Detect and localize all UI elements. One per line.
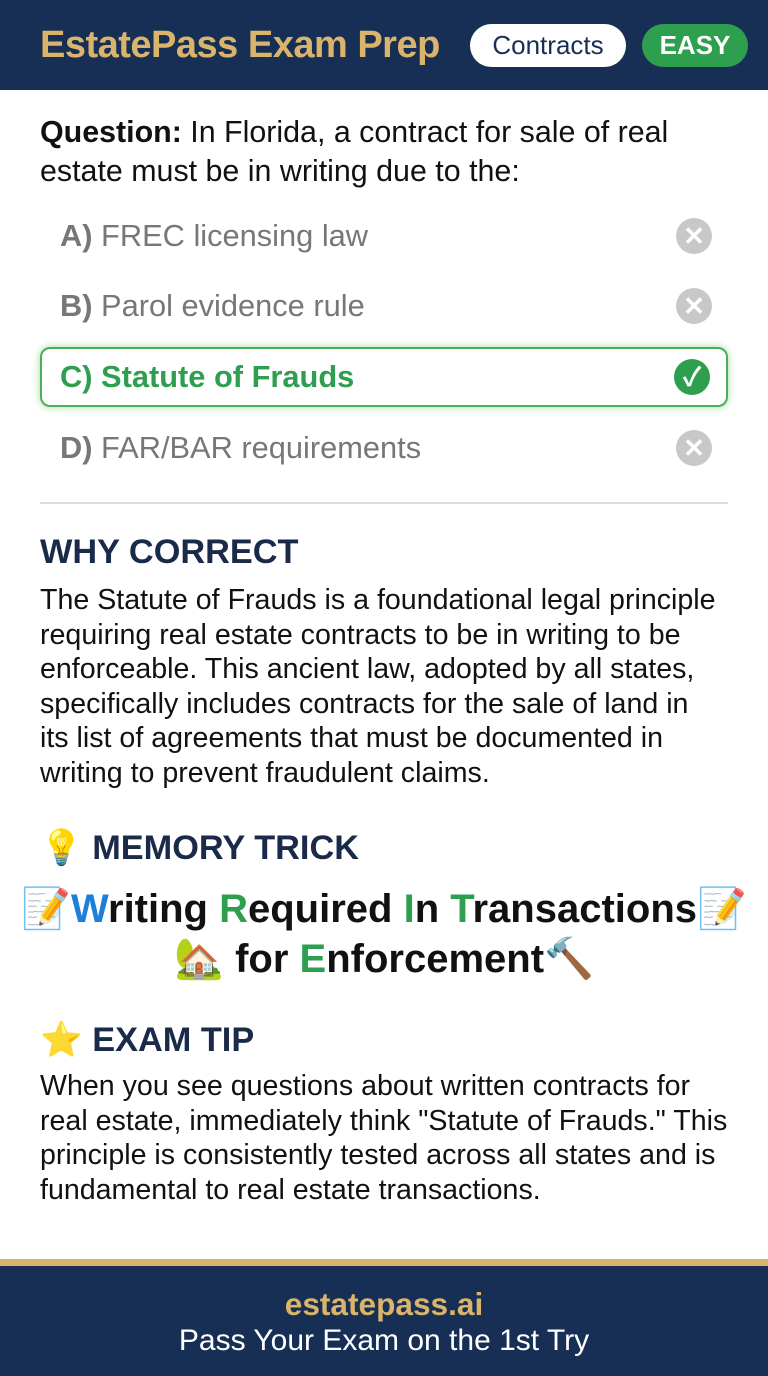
- option B: ✕: [683, 291, 705, 321]
- footer tagline: Pass Your Exam on the 1st Try: [179, 1324, 589, 1357]
- pill: EASY: [642, 24, 748, 67]
- why correct text: requiring real estate contracts to be in writing to be: [40, 619, 681, 651]
- why correct text: [40, 584, 716, 789]
- why correct text: specifically includes contracts for the sale of land in: [40, 688, 688, 720]
- option C correct: [40, 347, 728, 407]
- why correct text: its list of agreements that must be documented in: [40, 722, 663, 754]
- title: EstatePass Exam Prep: [40, 24, 440, 66]
- question: [40, 115, 668, 188]
- footer brand: estatepass.ai: [285, 1286, 483, 1322]
- mnemonic: [21, 886, 747, 981]
- pill: Contracts: Contracts: [492, 30, 604, 60]
- mnemonic: 📝Writing Required In Transactions📝: [21, 887, 747, 931]
- option B: B) Parol evidence rule: [60, 288, 365, 323]
- pill: EASY: EASY: [660, 30, 730, 60]
- why correct text: enforceable. This ancient law, adopted by all states,: [40, 653, 694, 685]
- option A: A) FREC licensing law: [60, 218, 368, 253]
- mnemonic: 🏡 for Enforcement🔨: [174, 937, 594, 981]
- option C correct: ✓: [683, 362, 701, 392]
- header: [0, 0, 768, 90]
- heading: exam tip: ⭐ EXAM TIP: [40, 1021, 254, 1059]
- option A: [60, 218, 712, 254]
- option D: [60, 430, 712, 466]
- option C correct: C) Statute of Frauds: [60, 359, 354, 394]
- exam tip text: [40, 1070, 727, 1206]
- why correct text: writing to prevent fraudulent claims.: [40, 757, 490, 789]
- exam tip text: real estate, immediately think "Statute of Frauds." This: [40, 1105, 727, 1137]
- option D: D) FAR/BAR requirements: [60, 430, 421, 465]
- pill: Contracts: [470, 24, 626, 67]
- exam tip text: principle is consistently tested across all states and is: [40, 1139, 715, 1171]
- option D: ✕: [683, 433, 705, 463]
- question: Question: In Florida, a contract for sale of real: [40, 115, 668, 149]
- question: estate must be in writing due to the:: [40, 154, 520, 188]
- option B: [60, 288, 712, 324]
- heading: why correct: WHY CORRECT: [40, 533, 298, 571]
- option A: ✕: [683, 221, 705, 251]
- exam tip text: When you see questions about written contracts for: [40, 1070, 690, 1102]
- why correct text: The Statute of Frauds is a foundational legal principle: [40, 584, 716, 616]
- heading: memory trick: 💡 MEMORY TRICK: [40, 829, 359, 867]
- exam tip text: fundamental to real estate transactions.: [40, 1174, 541, 1206]
- footer: [0, 1259, 768, 1376]
